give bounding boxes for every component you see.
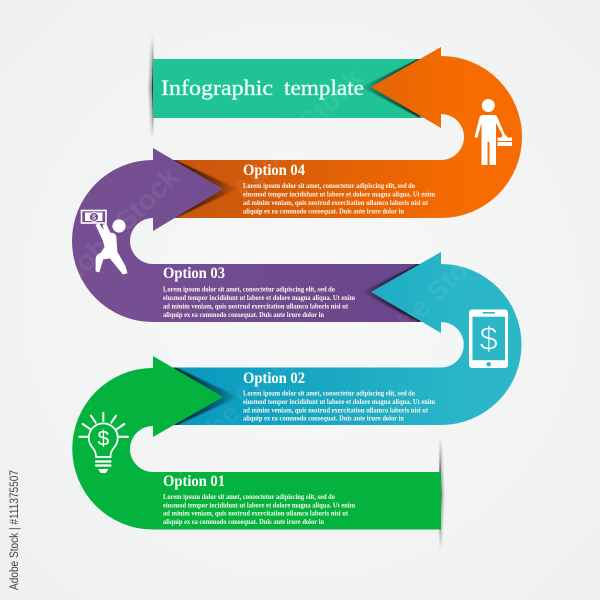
option 03 text block: ad minim veniam, quis nostrud exercitation ullamco laboris nisi ut [163,302,349,310]
stock id caption: Adobe Stock | #111375507 [9,470,21,590]
option 04 text block: eiusmod tempor incididunt ut labore et dolore magna aliqua. Ut enim [243,190,435,198]
title: Infographic [161,75,273,100]
option 01 text block [163,493,355,526]
option 03 text block: Lorem ipsum dolor sit amet, consectetur adipiscing elit, sed do [163,286,335,294]
option 01 heading: Option 01 [163,473,225,490]
watermark [14,20,517,523]
icon: smartphone with dollar sign [469,310,508,368]
arrow shadow on title banner [362,58,420,118]
option 04 heading: Option 04 [243,162,305,179]
title: template [284,75,364,100]
panel: option 01 green arrow [72,356,441,530]
option 01 text block: eiusmod tempor incididunt ut labore et dolore magna aliqua. Ut enim [163,502,355,510]
option 01 text block: ad minim veniam, quis nostrud exercitation ullamco laboris nisi ut [163,510,349,518]
icon: person lifting money [82,210,127,274]
option 01 text block: aliquip ex ea commodo consequat. Duis aute irure dolor in [163,518,324,526]
option 04 text block [243,182,435,216]
arrow shadow on orange band [173,159,238,219]
option 01 text block: Lorem ipsum dolor sit amet, consectetur adipiscing elit, sed do [163,493,335,501]
panel: title banner [153,59,423,118]
option 03 text block: eiusmod tempor incididunt ut labore et dolore magna aliqua. Ut enim [163,294,355,302]
option 04 text block: aliquip ex ea commodo consequat. Duis aute irure dolor in [243,208,404,216]
top left slit [149,35,154,140]
option 03 text block: aliquip ex ea commodo consequat. Duis aute irure dolor in [163,311,324,319]
icon: person lifting money: $ [92,213,97,222]
icon: businessman with briefcase [474,99,512,165]
watermark: Adobe Stock [226,62,369,205]
option 02 text block: eiusmod tempor incididunt ut labore et dolore magna aliqua. Ut enim [243,398,435,406]
option 04 text block: ad minim veniam, quis nostrud exercitation ullamco laboris nisi ut [243,199,429,207]
watermark: Adobe Stock [353,232,496,375]
option 02 text block: ad minim veniam, quis nostrud exercitation ullamco laboris nisi ut [243,406,429,414]
watermark: Adobe Stock [162,338,305,481]
bottom right slit [439,436,444,550]
icon: smartphone with dollar sign: $ [480,320,498,357]
arrow shadow on cyan band [173,366,238,427]
option 03 text block [163,286,355,319]
icon: light bulb with dollar sign: $ [97,428,109,450]
option 03 heading: Option 03 [163,265,225,282]
option 02 text block [243,390,435,422]
option 02 heading: Option 02 [243,370,305,387]
option 02 text block: Lorem ipsum dolor sit amet, consectetur adipiscing elit, sed do [243,390,415,398]
panel: option 02 cyan arrow [153,252,522,425]
arrow shadow on purple band [362,263,420,323]
option 04 text block: Lorem ipsum dolor sit amet, consectetur adipiscing elit, sed do [243,182,415,190]
panel: option 03 purple arrow [72,148,441,322]
icon: light bulb with dollar sign [79,413,128,472]
panel: option 04 orange arrow [153,47,522,218]
watermark: Adobe Stock [42,161,185,304]
option 02 text block: aliquip ex ea commodo consequat. Duis aute irure dolor in [243,414,404,422]
